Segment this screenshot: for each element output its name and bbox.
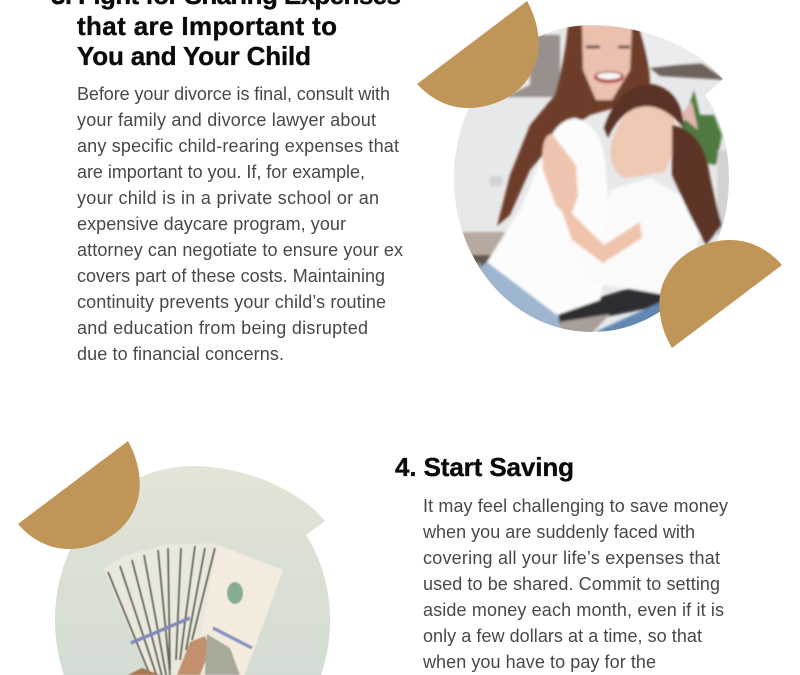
accent: top tan half circle <box>417 1 539 108</box>
section 3 body text: due to financial concerns. <box>77 344 284 364</box>
section 3 heading: You and Your Child <box>77 41 311 71</box>
section 3 body text: your family and divorce lawyer about <box>77 110 376 130</box>
section 4 body text: used to be shared. Commit to setting <box>423 574 720 594</box>
section 3 heading: that are Important to <box>77 11 337 41</box>
section 4 body text: when you are suddenly faced with <box>422 522 695 542</box>
section 4 body text: It may feel challenging to save money <box>423 496 728 516</box>
section 3 body text: covers part of these costs. Maintaining <box>77 266 385 286</box>
section 3 body text: are important to you. If, for example, <box>77 162 365 182</box>
section 3 body text: any specific child-rearing expenses that <box>77 136 399 156</box>
section 4 body text: only a few dollars at a time, so that <box>423 626 702 646</box>
section 4 body text: aside money each month, even if it is <box>423 600 724 620</box>
section 3 body text: attorney can negotiate to ensure your ex <box>77 240 403 260</box>
section 3 heading <box>51 0 401 71</box>
section 4 body text: when you have to pay for the <box>422 652 656 672</box>
section 4 heading: 4. Start Saving <box>395 452 574 482</box>
section 3 body text: expensive daycare program, your <box>77 214 346 234</box>
accent: lower section tan half circle <box>18 441 140 549</box>
photo: mother hugging daughter <box>450 20 735 335</box>
section 4 body text <box>422 496 728 672</box>
section 3 body text: and education from being disrupted <box>77 318 368 338</box>
section 3 body text: Before your divorce is final, consult with <box>77 84 390 104</box>
photo: hand holding fan of dollar bills <box>50 460 335 675</box>
section 3 body text: your child is in a private school or an <box>77 188 379 208</box>
section 3 body text <box>77 84 403 364</box>
section 3 body text: continuity prevents your child’s routine <box>77 292 386 312</box>
section 4 body text: covering all your life’s expenses that <box>423 548 720 568</box>
accent: bottom tan half circle <box>659 240 782 348</box>
